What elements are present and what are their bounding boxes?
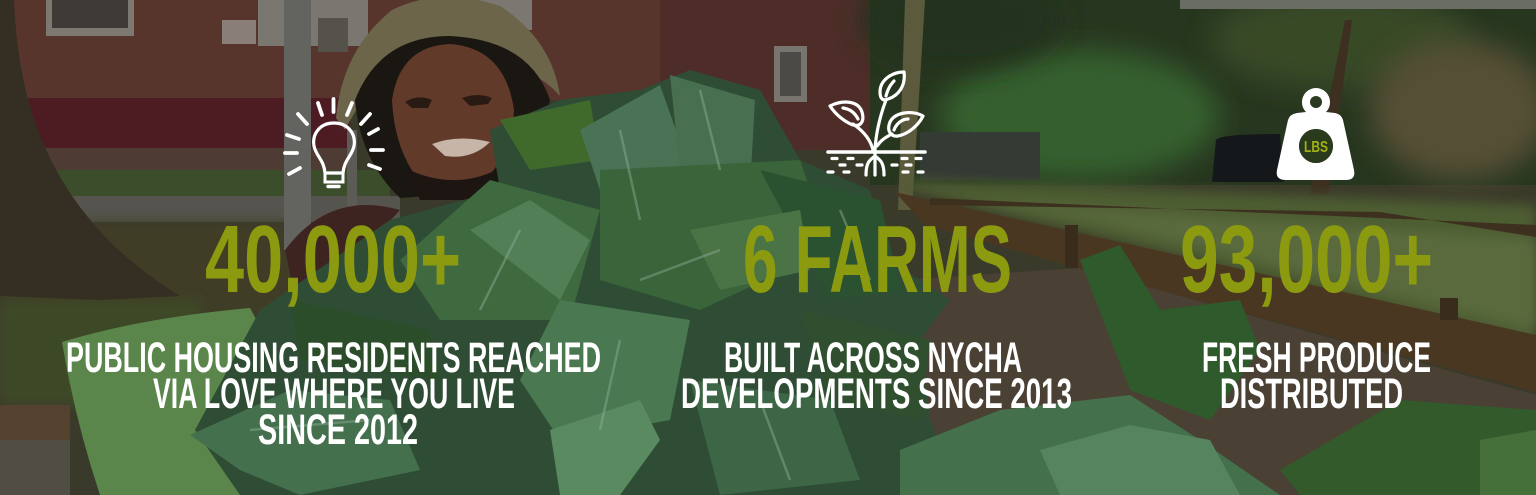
stat: residents reached: [66, 99, 601, 454]
kale bunch: [190, 70, 960, 495]
number: 93,000+: 93,000+: [1180, 206, 1433, 313]
caption: residents reached: PUBLIC HOUSING RESIDENTS REACHED: [66, 334, 601, 382]
icon: light bulb: [285, 99, 383, 186]
caption: produce distributed: DISTRIBUTED: [1220, 370, 1403, 418]
caption: produce distributed: [1202, 334, 1431, 418]
icon: sprout: [828, 72, 925, 175]
right side foliage: [860, 0, 1536, 345]
stat: farms built: [681, 72, 1072, 418]
raised bed and soil path: [895, 192, 1536, 495]
caption: farms built: [681, 334, 1072, 418]
gardener: hat and face: [285, 0, 560, 320]
caption: farms built: DEVELOPMENTS SINCE 2013: [681, 370, 1072, 418]
caption: residents reached: VIA LOVE WHERE YOU LIVE: [153, 370, 515, 418]
swiss chard and lower right greens: [900, 245, 1536, 495]
stat: produce distributed: [1180, 88, 1433, 418]
label: LBS: LBS: [1304, 139, 1328, 156]
tree trunk: [0, 0, 180, 300]
number: 6 FARMS: 6 FARMS: [743, 206, 1012, 313]
number: 40,000+: 40,000+: [205, 206, 461, 313]
icon: weight: [1277, 88, 1354, 180]
caption: farms built: BUILT ACROSS NYCHA: [724, 334, 1022, 382]
caption: residents reached: [66, 334, 601, 454]
caption: residents reached: SINCE 2012: [258, 406, 418, 454]
bucket: [62, 308, 300, 495]
